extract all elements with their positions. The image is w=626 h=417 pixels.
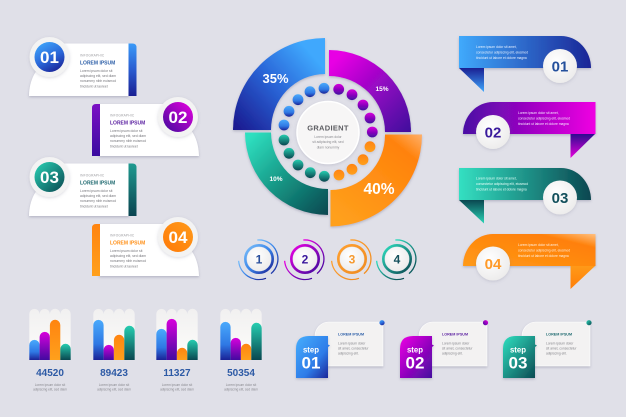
step card 03: LOREM IPSUM <box>546 332 572 336</box>
bar chart 50354 <box>220 309 262 392</box>
bar chart 89423 <box>93 309 135 392</box>
panel: card 03: tincidunt ut laoreet <box>80 204 108 208</box>
ribbon banner 04: consectetur adipiscing elit, eiusmod <box>518 248 570 252</box>
segment: 10% teal <box>245 132 328 215</box>
bar chart 11327: 11327 <box>163 368 191 379</box>
step card 01 <box>296 320 385 378</box>
bar chart 89423: 89423 <box>100 368 128 379</box>
label: 10%: 10% <box>269 176 283 183</box>
label: 35%: 35% <box>262 71 289 86</box>
ribbon banner 04: Lorem ipsum dolor sit amet, <box>518 243 559 247</box>
step card 03: sit amet, consectetur <box>546 346 577 350</box>
segment: 40% orange <box>330 134 422 226</box>
bar chart 11327: Lorem ipsum dolor sit <box>162 383 192 387</box>
number badge 1: 1 <box>256 252 263 266</box>
panel: card 01: LOREM IPSUM <box>80 60 115 66</box>
bar chart 50354: adipiscing elit, sed diam <box>224 388 258 392</box>
step card 01: 01 <box>302 353 320 372</box>
panel: card 01: Lorem ipsum dolor sit <box>80 69 112 73</box>
step card 03: Lorem ipsum dolor <box>546 341 574 345</box>
panel: card 03: nonummy nibh euismod <box>80 199 116 203</box>
center disc <box>297 102 359 164</box>
bar chart 44520 <box>29 309 71 392</box>
bar chart 11327 <box>156 309 198 392</box>
panel: card 02: INFOGRAPHIC <box>110 113 135 117</box>
center disc: GRADIENT <box>307 124 349 132</box>
label: 40%: 40% <box>363 181 395 198</box>
step card 03: 03 <box>509 353 527 372</box>
panel: card 02: adipiscing elit, sed diam <box>110 134 146 138</box>
number badge 4: 4 <box>394 252 401 266</box>
ribbon banner 01: 01 <box>552 58 568 76</box>
bar chart 89423: Lorem ipsum dolor sit <box>99 383 129 387</box>
segment: 15% magenta <box>329 50 411 132</box>
panel: card 03: INFOGRAPHIC <box>80 173 105 177</box>
panel: card 03: 03 <box>40 168 59 187</box>
ribbon banner 02: Lorem ipsum dolor sit amet, <box>518 111 559 115</box>
ribbon banner 02 <box>463 102 596 158</box>
panel: card 03: LOREM IPSUM <box>80 180 115 186</box>
label: 15%: 15% <box>375 86 389 93</box>
ribbon banner 01: tincidunt ut labore et dolore magna <box>476 56 527 60</box>
ribbon banner 03 <box>459 168 591 224</box>
panel: card 02 <box>92 97 199 156</box>
panel: card 02: LOREM IPSUM <box>110 120 145 126</box>
ribbon banner 03: Lorem ipsum dolor sit amet, <box>476 176 517 180</box>
bar chart 44520: 44520 <box>36 368 64 379</box>
step card 02: 02 <box>406 353 424 372</box>
panel: card 04: adipiscing elit, sed diam <box>110 254 146 258</box>
step card 02: adipiscing elit. <box>442 352 463 356</box>
ribbon banner 04: 04 <box>485 256 502 273</box>
bar chart 50354: 50354 <box>227 368 255 379</box>
panel: card 01: nonummy nibh euismod <box>80 79 116 83</box>
ribbon banner 01: Lorem ipsum dolor sit amet, <box>476 45 517 49</box>
step card 01: Lorem ipsum dolor <box>338 341 366 345</box>
bar chart 44520: Lorem ipsum dolor sit <box>35 383 65 387</box>
number badge 1 <box>239 240 278 280</box>
panel: card 01: tincidunt ut laoreet <box>80 84 108 88</box>
number badge 4 <box>377 240 416 280</box>
panel: card 01: 01 <box>40 48 59 67</box>
center disc: diam nonummy <box>317 146 340 150</box>
ribbon banner 03: consectetur adipiscing elit, eiusmod <box>476 182 528 186</box>
donut chart <box>233 38 422 226</box>
step card 03: adipiscing elit. <box>546 352 567 356</box>
step card 03: step <box>510 346 526 354</box>
panel: card 04: 04 <box>169 228 188 247</box>
step card 02: sit amet, consectetur <box>442 346 473 350</box>
step card 02: LOREM IPSUM <box>442 332 468 336</box>
panel: card 03: adipiscing elit, sed diam <box>80 194 116 198</box>
number badge 2 <box>285 240 324 280</box>
step card 02 <box>400 320 488 378</box>
panel: card 04 <box>92 217 199 276</box>
panel: card 04: Lorem ipsum dolor sit <box>110 249 142 253</box>
bar chart 50354: Lorem ipsum dolor sit <box>226 383 256 387</box>
panel: card 04: LOREM IPSUM <box>110 240 145 246</box>
bar chart 44520: adipiscing elit, sed diam <box>33 388 67 392</box>
panel: card 01: INFOGRAPHIC <box>80 53 105 57</box>
ribbon banner 04: tincidunt ut labore et dolore magna <box>518 254 569 258</box>
ribbon banner 04 <box>463 234 596 289</box>
step card 01: step <box>303 346 319 354</box>
number badge 3 <box>332 240 371 280</box>
ribbon banner 03: 03 <box>552 190 568 207</box>
panel: card 01: adipiscing elit, sed diam <box>80 74 116 78</box>
bar chart 89423: adipiscing elit, sed diam <box>97 388 131 392</box>
center disc: sit adipiscing elit, sed <box>312 140 344 144</box>
ribbon banner 01: consectetur adipiscing elit, eiusmod <box>476 50 528 54</box>
panel: card 02: tincidunt ut laoreet <box>110 144 138 148</box>
step card 01: adipiscing elit. <box>338 352 359 356</box>
center disc: Lorem ipsum dolor <box>314 135 343 139</box>
ribbon banner 02: tincidunt ut labore et dolore magna <box>518 122 569 126</box>
bar chart 11327: adipiscing elit, sed diam <box>160 388 194 392</box>
step card 02: step <box>407 346 423 354</box>
ribbon banner 01 <box>459 36 591 92</box>
panel: card 03: Lorem ipsum dolor sit <box>80 189 112 193</box>
step card 01: LOREM IPSUM <box>338 332 364 336</box>
panel: card 04: INFOGRAPHIC <box>110 233 135 237</box>
ribbon banner 02: consectetur adipiscing elit, eiusmod <box>518 116 570 120</box>
number badge 3: 3 <box>349 252 356 266</box>
step card 01: sit amet, consectetur <box>338 346 369 350</box>
panel: card 02: Lorem ipsum dolor sit <box>110 129 142 133</box>
panel: card 04: nonummy nibh euismod <box>110 259 146 263</box>
ribbon banner 03: tincidunt ut labore et dolore magna <box>476 187 527 191</box>
ring of dots <box>279 83 378 182</box>
segment: 35% blue <box>233 38 325 130</box>
panel: card 01 <box>29 37 136 96</box>
ribbon banner 02: 02 <box>485 124 501 142</box>
panel: card 02: nonummy nibh euismod <box>110 139 146 143</box>
step card 03 <box>503 320 592 378</box>
panel: card 03 <box>29 157 136 216</box>
panel: card 02: 02 <box>169 108 187 127</box>
step card 02: Lorem ipsum dolor <box>442 341 470 345</box>
panel: card 04: tincidunt ut laoreet <box>110 264 138 268</box>
number badge 2: 2 <box>302 252 309 266</box>
